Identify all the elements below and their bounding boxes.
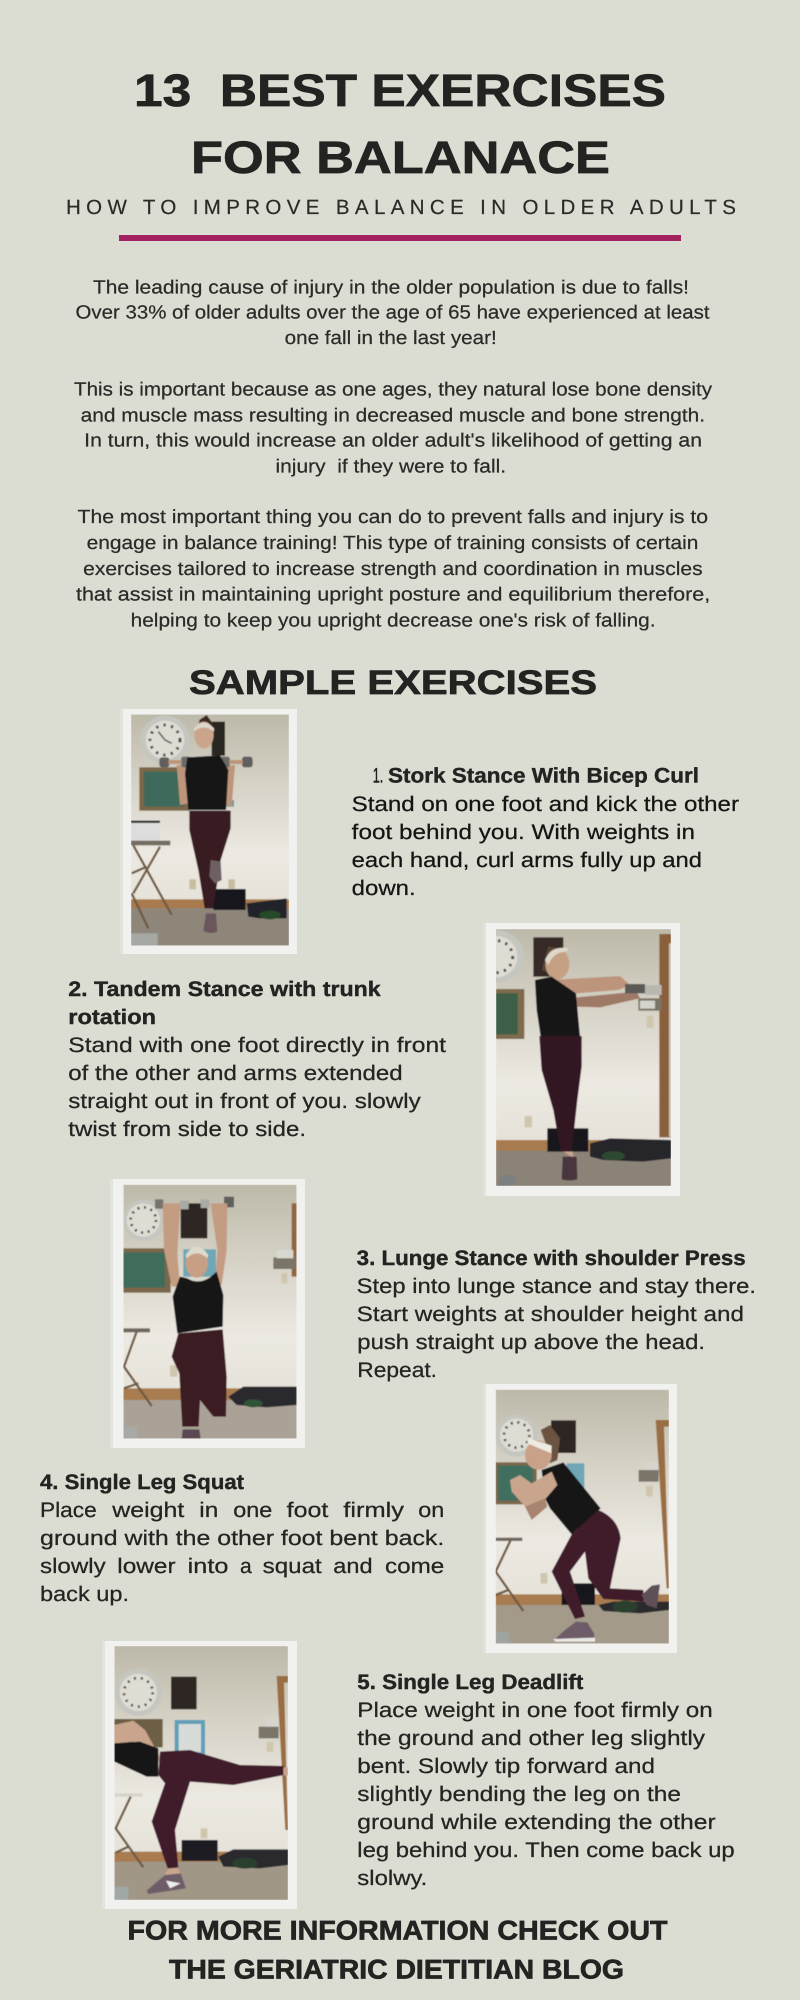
intro text	[74, 277, 713, 631]
body: exercise 4: weight	[111, 1499, 184, 1522]
body: exercise 5: Place weight in one foot firmly on	[357, 1699, 713, 1722]
heading: exercise 5: 5. Single Leg Deadlift	[357, 1671, 583, 1694]
body: exercise 4: come	[385, 1555, 444, 1578]
body: exercise 3: Step into lunge stance and stay there.	[357, 1275, 756, 1298]
body: exercise 4: squat	[263, 1555, 322, 1578]
text: exercise 1	[352, 765, 739, 900]
photo 4: single leg squat	[483, 1384, 677, 1653]
body: exercise 1: each hand, curl arms fully up and	[352, 849, 702, 872]
text: exercise 5	[357, 1671, 735, 1890]
photo 1: stork stance	[120, 709, 297, 954]
text: exercise 4	[40, 1471, 444, 1606]
body: exercise 5: the ground and other leg slightly	[357, 1727, 706, 1750]
paragraph: why it matters: This is important because as one ages, they natural lose bone density	[74, 380, 713, 400]
body: exercise 4: firmly	[343, 1499, 405, 1522]
body: exercise 5: slolwy.	[357, 1867, 427, 1890]
title: 13 BEST EXERCISES	[134, 65, 666, 116]
paragraph: why it matters: and muscle mass resulting in decreased muscle and bone strength.	[81, 405, 705, 426]
title	[134, 65, 666, 183]
body: exercise 3	[357, 1275, 756, 1382]
body: exercise 4: slowly	[40, 1555, 106, 1578]
subtitle: HOW TO IMPROVE BALANCE IN OLDER ADULTS	[66, 196, 736, 219]
body: exercise 4: Place	[40, 1499, 97, 1522]
body: exercise 4: into	[188, 1555, 228, 1578]
paragraph: falls statistic: one fall in the last year!	[285, 328, 497, 349]
text: exercise 2	[68, 978, 446, 1141]
paragraph: falls statistic	[76, 277, 710, 349]
body: exercise 4: a	[240, 1555, 252, 1578]
photo 3: lunge press	[110, 1179, 305, 1448]
body: exercise 4: on	[418, 1499, 444, 1522]
body: exercise 4: in	[199, 1499, 218, 1522]
photo 5: single leg deadlift	[102, 1641, 297, 1909]
body: exercise 4: ground with the other foot bent back.	[40, 1527, 444, 1550]
body: exercise 3: push straight up above the head.	[357, 1331, 705, 1354]
paragraph: balance training: engage in balance training! This type of training consists of certain	[87, 533, 698, 554]
paragraph: why it matters: In turn, this would increase an older adult's likelihood of getting an	[84, 430, 702, 451]
body: exercise 4: lower	[117, 1555, 176, 1578]
body: exercise 2: twist from side to side.	[68, 1118, 306, 1141]
body: exercise 3: Start weights at shoulder height and	[357, 1303, 744, 1326]
body: exercise 5: bent. Slowly tip forward and	[357, 1755, 655, 1778]
photo 2: tandem stance	[472, 923, 680, 1196]
heading: exercise 1: Stork Stance With Bicep Curl	[388, 765, 699, 788]
paragraph: falls statistic: Over 33% of older adults over the age of 65 have experienced at least	[76, 302, 710, 323]
body: exercise 4: foot	[287, 1499, 329, 1522]
body: exercise 2	[68, 1034, 446, 1141]
body: exercise 5: slightly bending the leg on the	[357, 1783, 681, 1806]
body: exercise 4: back up.	[40, 1583, 129, 1606]
paragraph: balance training: helping to keep you upright decrease one's risk of falling.	[131, 610, 656, 631]
paragraph: why it matters	[74, 380, 713, 477]
body: exercise 5	[357, 1699, 735, 1890]
body: exercise 1: Stand on one foot and kick the other	[352, 793, 739, 816]
body: exercise 4: and	[333, 1555, 373, 1578]
body: exercise 2: Stand with one foot directly in front	[68, 1034, 446, 1057]
body: exercise 5: leg behind you. Then come back up	[357, 1839, 735, 1862]
paragraph: balance training	[76, 507, 710, 631]
title: FOR BALANACE	[191, 132, 610, 183]
paragraph: why it matters: injury if they were to fall.	[276, 456, 506, 477]
body: exercise 2: straight out in front of you. slowly	[68, 1090, 421, 1113]
footer call to action: FOR MORE INFORMATION CHECK OUT	[128, 1915, 668, 1945]
text: exercise 3	[357, 1247, 756, 1382]
paragraph: balance training: that assist in maintaining upright posture and equilibrium therefore,	[76, 584, 710, 605]
body: exercise 4	[40, 1499, 444, 1606]
paragraph: balance training: exercises tailored to increase strength and coordination in muscles	[83, 559, 703, 580]
heading: exercise 4: 4. Single Leg Squat	[40, 1471, 244, 1494]
paragraph: falls statistic: The leading cause of injury in the older population is due to falls!	[93, 277, 689, 298]
body: exercise 3: Repeat.	[357, 1359, 437, 1382]
body: exercise 1: foot behind you. With weights in	[352, 821, 695, 844]
body: exercise 5: ground while extending the other	[357, 1811, 716, 1834]
body: exercise 1: down.	[352, 877, 416, 900]
footer call to action	[128, 1915, 668, 1984]
footer call to action: THE GERIATRIC DIETITIAN BLOG	[169, 1954, 624, 1984]
body: exercise 1	[352, 793, 739, 900]
paragraph: balance training: The most important thing you can do to prevent falls and injury is to	[78, 507, 708, 528]
body: exercise 4: one	[233, 1499, 272, 1522]
accent rule	[119, 235, 681, 241]
heading: exercise 2: 2. Tandem Stance with trunk	[68, 978, 381, 1001]
section heading: SAMPLE EXERCISES	[189, 664, 597, 702]
heading: exercise 3: 3. Lunge Stance with shoulder Press	[357, 1247, 746, 1270]
heading: exercise 2	[68, 978, 381, 1029]
heading: exercise 1: 1.	[373, 765, 383, 788]
heading: exercise 2: rotation	[68, 1006, 156, 1029]
body: exercise 2: of the other and arms extended	[68, 1062, 403, 1085]
